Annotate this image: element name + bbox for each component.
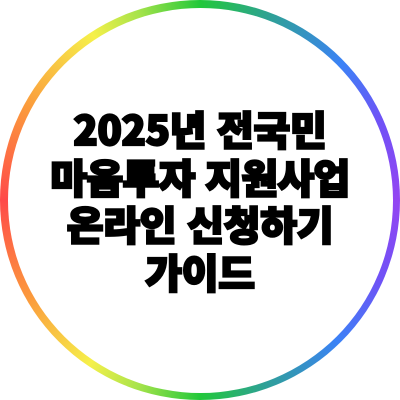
- title: 마음투자 지원사업: [50, 146, 350, 204]
- title: 온라인 신청하기: [67, 194, 333, 252]
- title: 가이드: [145, 242, 255, 300]
- title: 2025년 전국민: [73, 99, 327, 157]
- title: [50, 99, 350, 300]
